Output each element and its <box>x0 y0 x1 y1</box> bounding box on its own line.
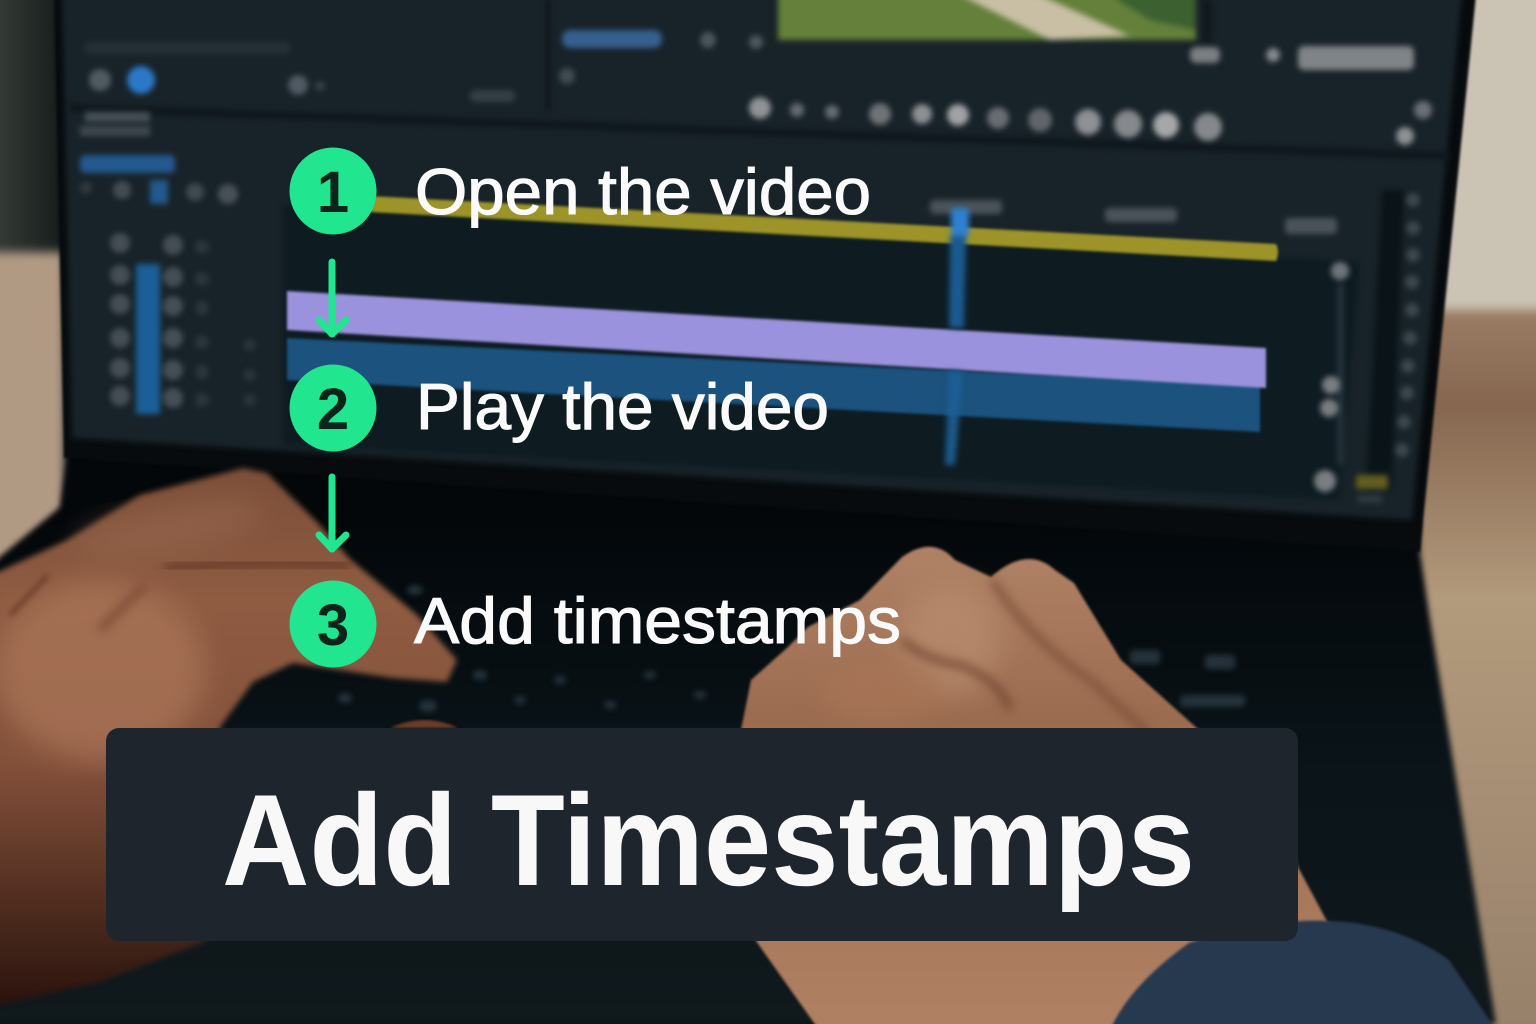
top-left controls <box>80 42 515 204</box>
step 2 label: Play the video <box>416 370 829 443</box>
step 1 label: Open the video <box>415 155 871 228</box>
step 1 <box>290 148 871 234</box>
timeline tracks <box>287 196 1278 432</box>
right side sliders <box>1314 190 1420 503</box>
step 1 badge <box>290 148 376 234</box>
playhead <box>945 208 969 465</box>
step 3 badge <box>290 580 376 668</box>
step 3 label: Add timestamps <box>414 584 901 657</box>
step 2 badge <box>290 364 376 452</box>
step 3 <box>290 580 901 668</box>
timeline panel <box>282 205 1360 500</box>
arrow 2 to 3 <box>319 477 346 549</box>
left track controls <box>110 233 256 414</box>
right hand <box>741 547 1329 1024</box>
laptop screen bezel <box>54 0 1476 552</box>
video preview <box>778 0 1196 40</box>
arrow 1 to 2 <box>319 262 346 334</box>
top-right controls <box>559 30 1432 234</box>
step 1 badge: 1 <box>317 160 349 225</box>
step 3 badge: 3 <box>317 593 349 658</box>
laptop base and keyboard <box>0 440 1496 1024</box>
keyboard keys <box>338 585 1245 712</box>
laptop screen <box>62 0 1462 520</box>
sleeve <box>1110 921 1496 1024</box>
title: Add Timestamps <box>222 767 1195 913</box>
step 2 badge: 2 <box>317 377 349 442</box>
step 2 <box>290 364 829 452</box>
screen panel dividers <box>70 0 1450 160</box>
left hand <box>0 468 458 1008</box>
title banner <box>106 728 1298 941</box>
